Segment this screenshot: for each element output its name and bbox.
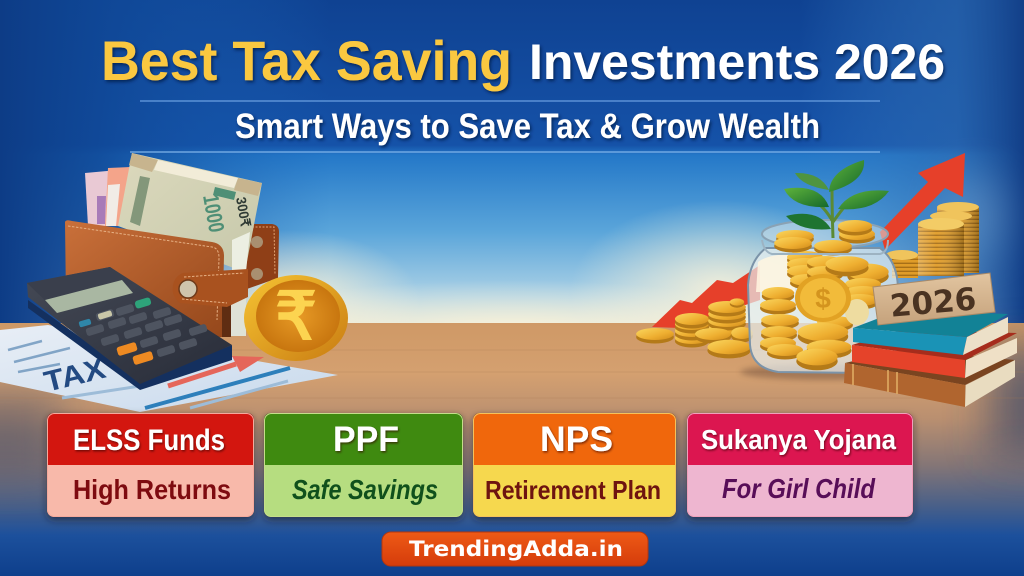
subtitle: Smart Ways to Save Tax & Grow Wealth [235, 107, 820, 146]
2026 label: 2026 [889, 281, 978, 325]
red book [852, 330, 1017, 378]
card title: NPS [540, 420, 613, 459]
footer brand pill [382, 532, 648, 566]
card: Sukanya Yojana [687, 413, 913, 517]
illustration: glass jar of coins [740, 220, 910, 380]
illustration: stack of books [844, 273, 1017, 407]
illustration: green plant [784, 160, 889, 238]
brand text: TrendingAdda.in [409, 537, 623, 561]
illustration: gold coin stacks behind jar [886, 202, 979, 278]
large dollar coin: $ [815, 283, 831, 314]
coins inside jar [760, 251, 889, 370]
divider below subtitle [130, 151, 880, 153]
card subtitle: High Returns [73, 474, 231, 505]
card subtitle: Safe Savings [292, 474, 438, 505]
rupee symbol: ₹ [275, 279, 317, 353]
illustration: rupee coin [244, 275, 348, 361]
teal book [853, 310, 1008, 355]
wallet back strap [244, 224, 279, 290]
illustration: calculator [27, 267, 232, 390]
large banknote [118, 153, 262, 272]
pink banknotes [85, 167, 130, 226]
title [101, 29, 945, 92]
wallet clasp [173, 269, 248, 307]
divider above subtitle [140, 100, 880, 102]
background: wooden table [0, 323, 1024, 576]
large dollar coin [795, 274, 851, 322]
illustration: tax document [0, 325, 338, 412]
large banknote: 1000 [198, 193, 229, 234]
illustration: wallet with banknotes [65, 153, 279, 340]
card: ELSS Funds [47, 413, 254, 517]
wooden 2026 block [873, 273, 995, 325]
card title: Sukanya Yojana [701, 424, 896, 455]
title: yellow part: Best Tax Saving [101, 29, 512, 92]
card subtitle: Retirement Plan [485, 475, 661, 505]
leaves [829, 160, 864, 192]
TAX label: TAX [41, 353, 110, 399]
large banknote: 300₹ [233, 196, 254, 228]
illustration: red growth arrow [652, 153, 965, 328]
wallet body [65, 220, 224, 340]
card title: ELSS Funds [73, 424, 225, 457]
calculator screen [45, 280, 133, 313]
card: PPF [264, 413, 463, 517]
background: blue sky [0, 0, 1024, 380]
card subtitle: For Girl Child [722, 473, 876, 504]
calculator keys [78, 297, 208, 365]
wallet rivets [251, 236, 263, 248]
card: NPS [473, 413, 676, 517]
card title: PPF [333, 420, 399, 459]
brown book [844, 350, 1015, 407]
illustration: small coin piles on table [636, 298, 753, 358]
title: white part: Investments 2026 [529, 34, 945, 90]
jar rim and top coins [762, 220, 888, 256]
